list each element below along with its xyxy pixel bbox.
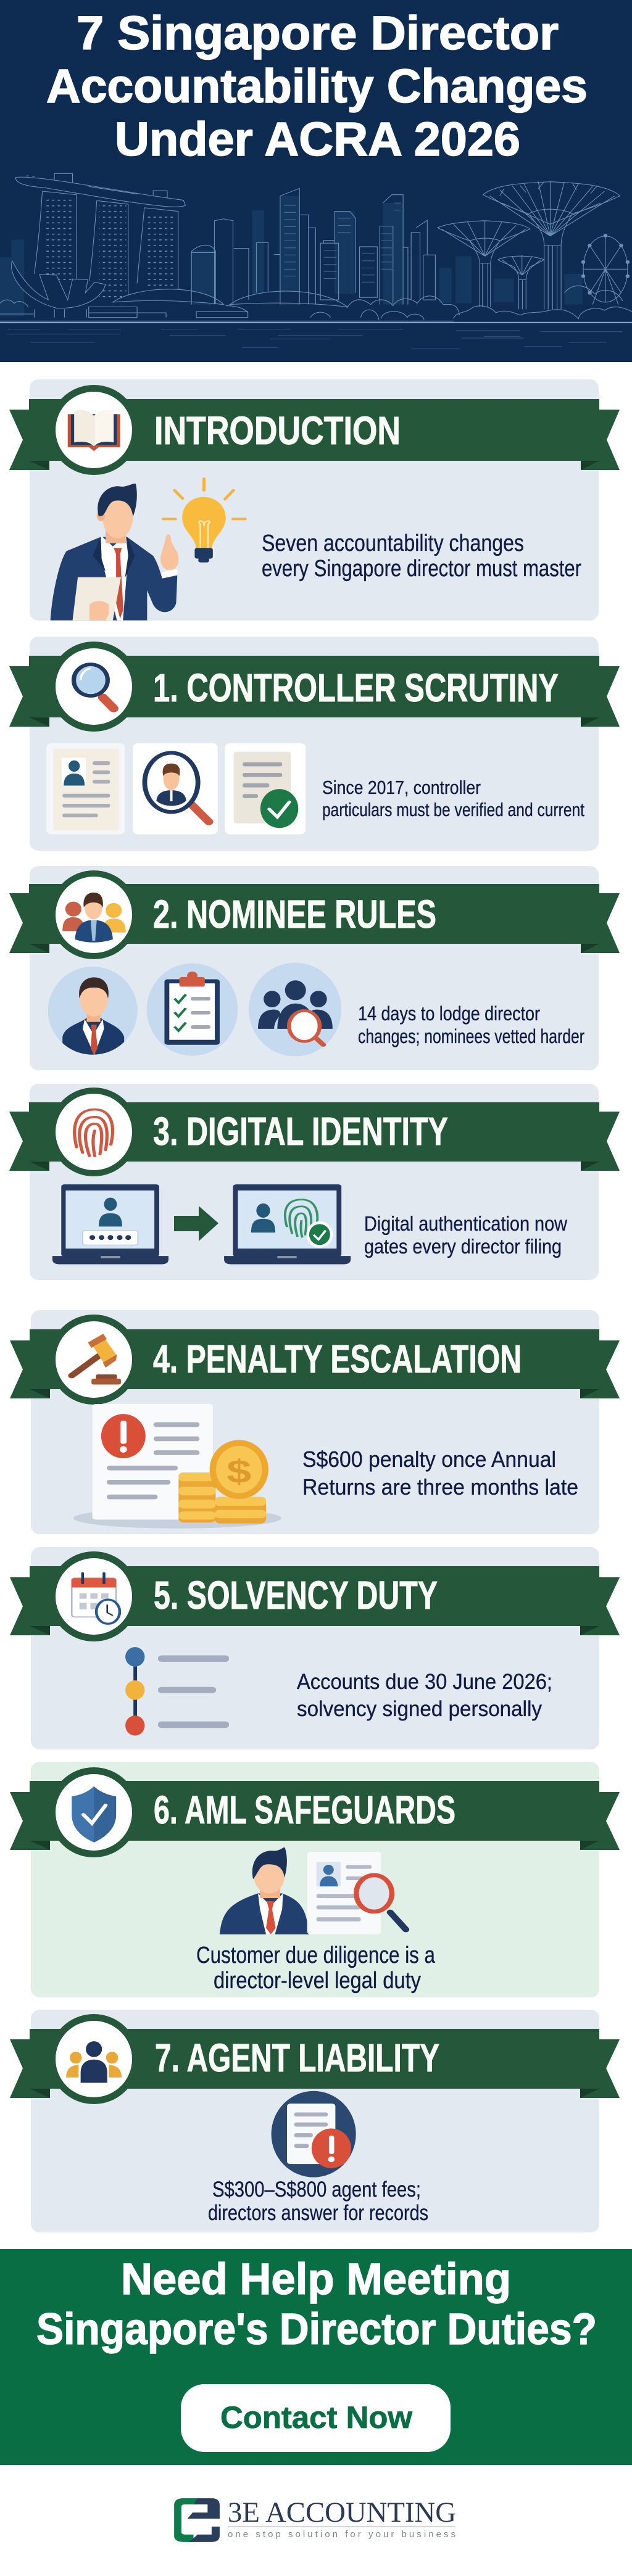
- text: controller scrutiny: Since 2017, controller: [322, 777, 481, 798]
- title: 7 Singapore Director: [77, 7, 559, 60]
- text: agent liability: S$300–S$800 agent fees;: [212, 2178, 421, 2202]
- heading: digital identity: 3. DIGITAL IDENTITY: [153, 1109, 448, 1154]
- panel: 4. penalty escalation: [10, 1310, 620, 1534]
- heading: aml safeguards: 6. AML SAFEGUARDS: [154, 1788, 455, 1832]
- icon: shield: [72, 1786, 116, 1843]
- ribbon: controller scrutiny: [9, 642, 620, 732]
- panel: introduction: [9, 379, 620, 621]
- text: penalty escalation: Returns are three months late: [302, 1474, 578, 1500]
- ribbon: solvency duty: [10, 1551, 620, 1641]
- icon: agent group: [66, 2041, 122, 2083]
- call to action banner: [0, 2249, 632, 2465]
- ribbon: penalty escalation: [10, 1315, 620, 1405]
- logo mark: [174, 2498, 220, 2542]
- logo tagline: one stop solution for your business: [228, 2529, 455, 2540]
- tile: verified document: [225, 743, 306, 835]
- text: agent liability: [208, 2178, 428, 2225]
- illustration: password laptop: [52, 1184, 168, 1265]
- panel: 3. digital identity: [9, 1084, 620, 1280]
- text: solvency duty: Accounts due 30 June 2026;: [297, 1670, 552, 1694]
- timeline: [125, 1647, 229, 1736]
- illustration: businessman with light bulb: [51, 479, 245, 621]
- text: introduction: [262, 530, 581, 582]
- illustration: penalty notice with coins: $: [227, 1454, 251, 1490]
- text: agent liability: directors answer for records: [208, 2201, 428, 2225]
- trees: [0, 296, 460, 315]
- title: [46, 7, 588, 166]
- skyline illustration: [0, 173, 632, 349]
- panel: 2. nominee rules: [9, 866, 620, 1070]
- illustration: due diligence: [220, 1847, 406, 1934]
- call to action heading: Singapore's Director Duties?: [36, 2305, 597, 2354]
- arrow: [174, 1206, 218, 1241]
- panel: 7. agent liability: [10, 2010, 620, 2232]
- text: nominee rules: [358, 1002, 584, 1047]
- icon: calendar and clock: [72, 1574, 120, 1624]
- tile: magnified person: [133, 743, 218, 835]
- text: penalty escalation: S$600 penalty once Annual: [302, 1447, 556, 1472]
- text: solvency duty: solvency signed personally: [297, 1697, 542, 1721]
- supertrees: [483, 182, 620, 309]
- heading: penalty escalation: 4. PENALTY ESCALATION: [153, 1337, 522, 1381]
- text: digital identity: [364, 1212, 567, 1258]
- text: solvency duty: [297, 1670, 552, 1721]
- illustration: fingerprint verified laptop: [224, 1184, 351, 1265]
- text: digital identity: gates every director filing: [364, 1235, 562, 1258]
- icon: gavel: [72, 1334, 121, 1384]
- title: Accountability Changes: [46, 60, 588, 113]
- ribbon: aml safeguards: [10, 1767, 620, 1857]
- panel: 6. aml safeguards: [10, 1762, 620, 1997]
- icon: fingerprint: [75, 1110, 112, 1156]
- text: digital identity: Digital authentication now: [364, 1212, 567, 1235]
- text: penalty escalation: [302, 1447, 578, 1500]
- title: Under ACRA 2026: [115, 113, 520, 166]
- text: aml safeguards: director-level legal duty: [214, 1968, 421, 1994]
- illustration: group under magnifier: [249, 963, 341, 1056]
- heading: solvency duty: 5. SOLVENCY DUTY: [154, 1573, 438, 1617]
- call to action heading: [36, 2255, 597, 2354]
- call to action heading: Need Help Meeting: [121, 2255, 511, 2304]
- ferris wheel: [583, 236, 628, 302]
- ribbon: nominee rules: [9, 870, 620, 959]
- logo: 3E Accounting: [174, 2496, 456, 2542]
- panel: 1. controller scrutiny: [9, 637, 620, 851]
- ribbon: agent liability: [10, 2014, 620, 2104]
- panel: 5. solvency duty: [10, 1547, 620, 1749]
- contact button: Contact Now: [220, 2400, 412, 2435]
- illustration: nominee portrait: [48, 967, 138, 1056]
- text: controller scrutiny: [322, 777, 584, 820]
- icon: people group: [62, 893, 126, 943]
- illustration: records warning: [272, 2091, 356, 2178]
- ribbon: digital identity: [9, 1088, 620, 1176]
- heading: agent liability: 7. AGENT LIABILITY: [155, 2036, 439, 2080]
- header banner: [0, 0, 632, 362]
- text: aml safeguards: Customer due diligence is a: [196, 1942, 436, 1968]
- icon: open book: [68, 410, 120, 451]
- text: introduction: Seven accountability changes: [262, 530, 524, 556]
- icon: magnifying glass: [74, 664, 114, 708]
- heading: introduction: INTRODUCTION: [154, 408, 401, 453]
- text: nominee rules: 14 days to lodge director: [358, 1002, 540, 1025]
- heading: nominee rules: 2. NOMINEE RULES: [153, 892, 436, 936]
- illustration: penalty notice with coins: [73, 1404, 281, 1529]
- illustration: checklist clipboard: [147, 964, 238, 1056]
- contact button: [181, 2384, 451, 2452]
- tile: profile document: [46, 743, 125, 835]
- ribbon: introduction: [9, 385, 620, 475]
- text: aml safeguards: [196, 1942, 436, 1994]
- logo wordmark: 3E ACCOUNTING: [228, 2496, 456, 2529]
